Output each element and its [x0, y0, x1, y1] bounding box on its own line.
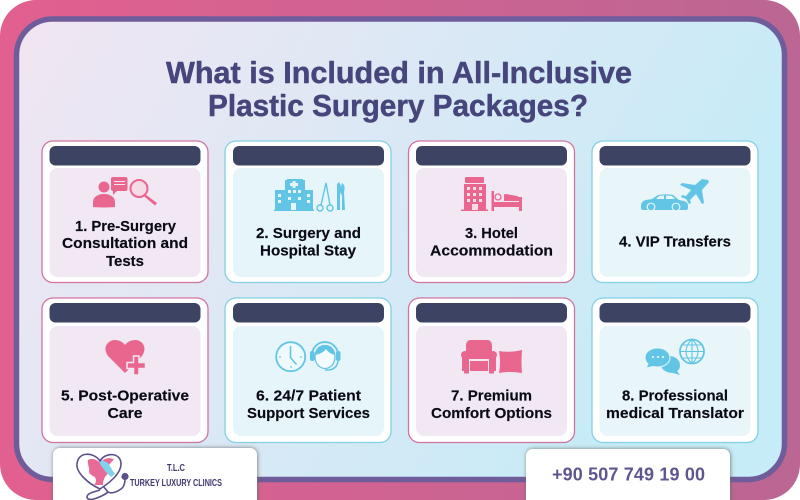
label: Consultation and [62, 235, 188, 252]
icon: hospital and surgical tools [274, 179, 345, 211]
label: Accommodation [430, 242, 553, 260]
logo text: TURKEY LUXURY CLINICS [130, 478, 222, 489]
label: 5. Post-Operative [61, 388, 189, 404]
icon: heart stethoscope logo [77, 454, 128, 499]
icon: speech bubbles and globe [645, 340, 704, 375]
label: 3. Hotel [465, 225, 518, 242]
icon: clock and headset agent [276, 342, 340, 371]
card 4: VIP transfers [592, 141, 758, 282]
card 5: post-operative care [42, 298, 208, 442]
label: Hospital Stay [260, 242, 357, 260]
card 1: pre-surgery consultation [42, 141, 208, 282]
label: Care [108, 405, 142, 422]
card 3: hotel accommodation [408, 141, 574, 282]
label [431, 388, 552, 422]
label: 1. Pre-Surgery [75, 218, 177, 235]
title [166, 55, 632, 123]
icon: heart with plus [105, 340, 146, 375]
label [430, 225, 553, 260]
label [62, 218, 188, 270]
logo text [130, 463, 222, 489]
label [247, 388, 370, 422]
title: What is Included in All-Inclusive [166, 55, 632, 90]
logo text: T.L.C [167, 463, 185, 474]
icon: hotel and bed [461, 177, 522, 211]
label: 4. VIP Transfers [619, 234, 731, 250]
label [256, 225, 361, 260]
card 6: 24/7 patient support [225, 298, 391, 442]
label: Support Services [247, 405, 370, 422]
title: Plastic Surgery Packages? [208, 88, 588, 123]
label: 8. Professional [622, 388, 728, 404]
phone plate: +90 507 749 19 00 [552, 464, 705, 484]
logo plate [53, 448, 257, 500]
label: medical Translator [606, 405, 744, 422]
label: Comfort Options [431, 405, 552, 422]
card 2: surgery and hospital stay [225, 141, 391, 282]
label: Tests [106, 253, 144, 270]
icon: doctor, speech bubble and magnifier [93, 177, 157, 208]
label: 6. 24/7 Patient [256, 388, 361, 404]
label [606, 388, 744, 422]
icon: car and plane [641, 179, 709, 211]
label: 7. Premium [451, 388, 532, 404]
label: 2. Surgery and [256, 225, 361, 242]
label [61, 388, 189, 422]
card 8: professional medical translator [592, 298, 758, 442]
icon: armchair and pillow [461, 340, 522, 374]
card 7: premium comfort options [408, 298, 574, 442]
phone plate [526, 449, 730, 500]
